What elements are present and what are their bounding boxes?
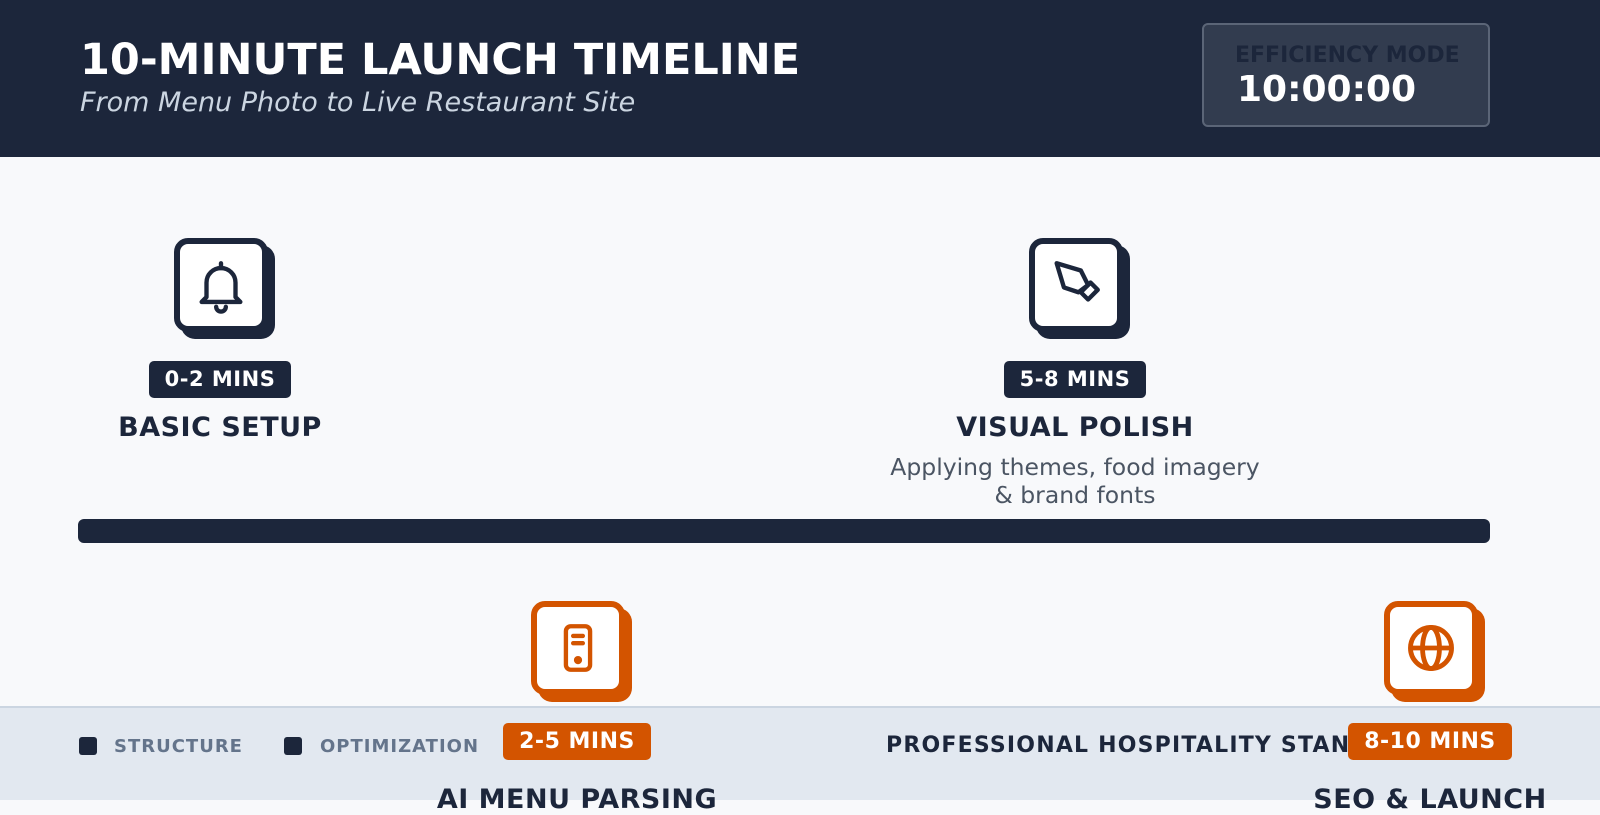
efficiency timer: EFFICIENCY MODE <box>1235 43 1460 68</box>
footer <box>0 706 1600 800</box>
description: & brand fonts <box>994 481 1156 509</box>
badge: 8-10 MINS <box>1364 729 1496 754</box>
badge <box>503 723 651 760</box>
badge <box>1004 361 1146 398</box>
description: Applying themes, food imagery <box>890 453 1260 481</box>
legend: structure <box>79 737 97 755</box>
timeline bar <box>78 519 1490 543</box>
text: OPTIMIZATION <box>320 736 479 757</box>
icon: device <box>531 601 625 695</box>
icon: globe <box>1384 601 1478 695</box>
icon: pen <box>1029 238 1123 332</box>
header <box>0 0 1600 157</box>
efficiency timer <box>1202 23 1490 127</box>
badge: 0-2 MINS <box>165 367 275 391</box>
name: VISUAL POLISH <box>956 412 1194 443</box>
badge <box>1348 723 1512 760</box>
efficiency timer: 10:00:00 <box>1237 69 1416 110</box>
name: BASIC SETUP <box>118 412 322 443</box>
text: STRUCTURE <box>114 736 243 757</box>
step: SEO & launch <box>1313 601 1547 815</box>
footer tagline: PROFESSIONAL HOSPITALITY STANDARDS <box>886 733 1443 758</box>
icon: bell <box>174 238 268 332</box>
step: basic setup <box>118 238 322 443</box>
badge <box>149 361 291 398</box>
subtitle: From Menu Photo to Live Restaurant Site <box>80 87 635 118</box>
description <box>890 453 1260 509</box>
step: visual polish <box>890 238 1260 509</box>
step: AI menu parsing <box>437 601 717 815</box>
name: AI MENU PARSING <box>437 784 717 815</box>
badge: 5-8 MINS <box>1020 367 1130 391</box>
legend: optimization <box>284 737 302 755</box>
title: 10-MINUTE LAUNCH TIMELINE <box>80 35 800 85</box>
badge: 2-5 MINS <box>519 729 635 754</box>
name: SEO & LAUNCH <box>1313 784 1547 815</box>
